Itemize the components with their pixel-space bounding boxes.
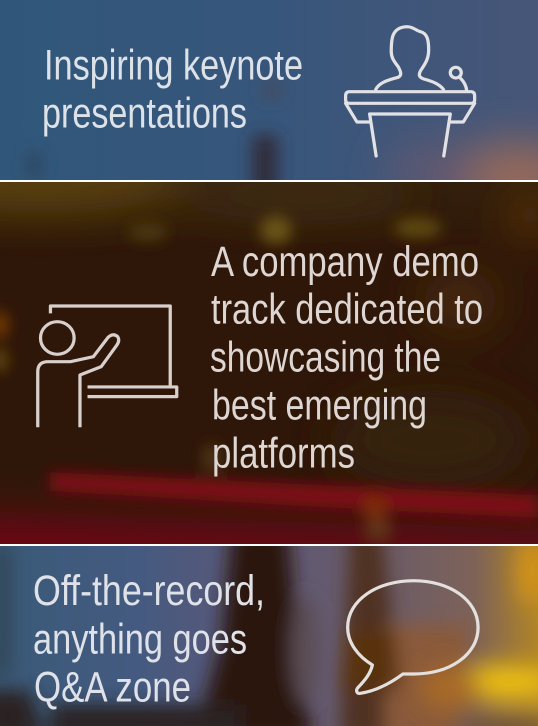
panel: Q&A zone — [0, 546, 538, 726]
icon: presenter at board — [38, 306, 177, 427]
text block: Q&A description — [33, 567, 265, 712]
heading: keynote text — [42, 42, 303, 138]
text block: demo track description — [210, 238, 483, 478]
text block: demo track description: platforms — [212, 430, 355, 478]
heading: keynote text: Inspiring keynote — [44, 42, 303, 90]
icon: speaker at podium — [346, 27, 475, 156]
text block: demo track description: showcasing the — [210, 334, 441, 382]
panel: keynote presentations — [0, 0, 538, 180]
heading: keynote text: presentations — [42, 90, 247, 138]
text block: demo track description: A company demo — [211, 238, 479, 286]
text block: Q&A description: Off-the-record, — [33, 567, 265, 615]
icon: speech bubble — [348, 581, 478, 693]
text block: Q&A description: Q&A zone — [34, 664, 191, 712]
text block: Q&A description: anything goes — [33, 616, 247, 664]
text block: demo track description: best emerging — [212, 382, 427, 430]
panel: company demo track — [0, 182, 538, 544]
